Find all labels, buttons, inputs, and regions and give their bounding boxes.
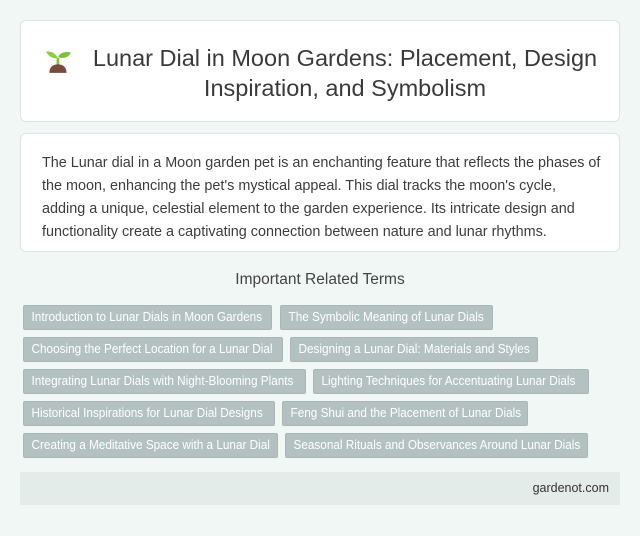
heading: related terms: Important Related Terms	[235, 271, 405, 288]
tag	[313, 369, 589, 394]
tag: Designing a Lunar Dial: Materials and Styles	[299, 342, 530, 356]
description text: functionality create a captivating connection between nature and lunar rhythms.	[42, 224, 547, 240]
description text	[42, 155, 600, 240]
tag	[23, 433, 278, 458]
tag	[282, 401, 528, 426]
title: Inspiration, and Symbolism	[204, 75, 486, 101]
footer text: gardenot.com	[533, 481, 609, 495]
tag: Choosing the Perfect Location for a Lunar Dial	[32, 342, 273, 356]
tag: Lighting Techniques for Accentuating Lunar Dials	[322, 374, 575, 388]
tag	[290, 337, 538, 362]
description text: the moon, enhancing the pet's mystical appeal. This dial tracks the moon's cycle,	[42, 178, 556, 194]
tag	[23, 337, 283, 362]
tag	[23, 401, 275, 426]
tag: Feng Shui and the Placement of Lunar Dials	[291, 406, 521, 420]
description card	[20, 133, 620, 252]
footer	[20, 472, 620, 505]
tag	[280, 305, 493, 330]
title card	[20, 20, 620, 122]
tag: Historical Inspirations for Lunar Dial Designs	[32, 406, 263, 420]
title: Lunar Dial in Moon Gardens: Placement, Design	[93, 45, 597, 71]
icon: sprout	[46, 52, 71, 73]
description text: adding a unique, celestial element to the garden experience. Its intricate design and	[42, 201, 575, 217]
tag: Creating a Meditative Space with a Lunar Dial	[32, 438, 270, 452]
tag: Integrating Lunar Dials with Night-Blooming Plants	[32, 374, 293, 388]
tag	[23, 369, 306, 394]
tag: Introduction to Lunar Dials in Moon Gardens	[32, 310, 262, 324]
tag: Seasonal Rituals and Observances Around Lunar Dials	[294, 438, 580, 452]
tag	[285, 433, 588, 458]
tag: The Symbolic Meaning of Lunar Dials	[289, 310, 484, 324]
description text: The Lunar dial in a Moon garden pet is an enchanting feature that reflects the phases of	[42, 155, 600, 171]
title	[93, 45, 597, 101]
tag	[23, 305, 272, 330]
